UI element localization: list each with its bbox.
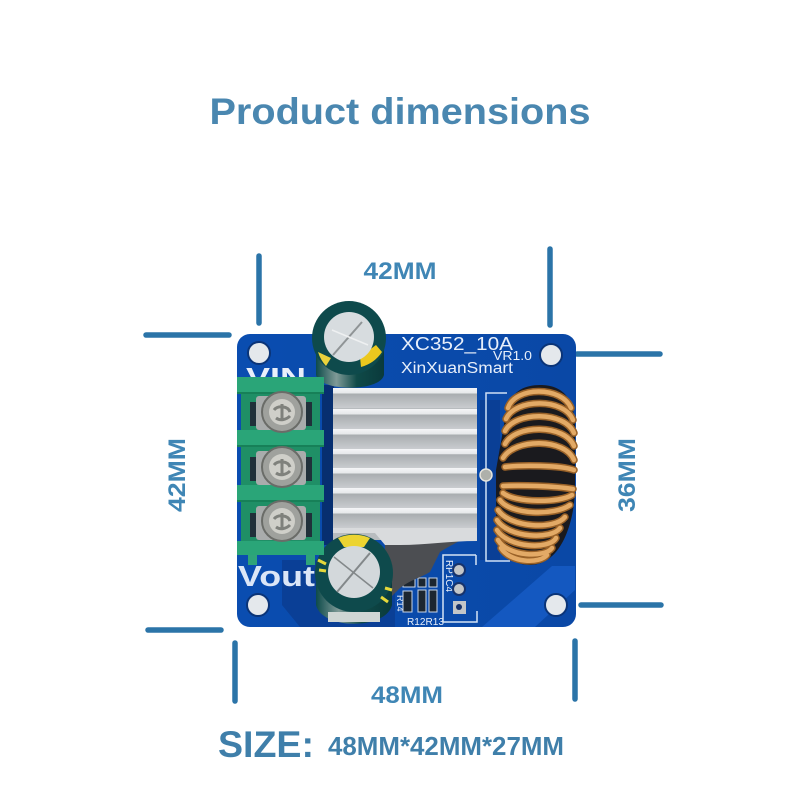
dimension lines xyxy=(146,249,661,701)
heat sink xyxy=(333,388,477,545)
connector outline and pads xyxy=(443,555,477,622)
board text: R12R13 xyxy=(407,616,444,628)
terminal screw 1 xyxy=(250,392,312,432)
green screw terminal xyxy=(237,377,324,565)
label: right height 36MM: 36MM xyxy=(614,438,641,512)
label: top width 42MM: 42MM xyxy=(364,258,436,285)
board text: XinXuanSmart xyxy=(401,360,514,377)
label: bottom width 48MM: 48MM xyxy=(371,682,443,709)
label: left height 42MM: 42MM xyxy=(164,438,191,512)
size summary: 48MM*42MM*27MM xyxy=(328,731,564,761)
top capacitor xyxy=(312,301,386,388)
pcb copper pours xyxy=(282,385,575,627)
board text: RP1C4 xyxy=(443,560,455,592)
circuit board xyxy=(237,301,576,628)
board text: R14 xyxy=(395,595,405,612)
inductor silkscreen outline xyxy=(486,393,510,561)
toroid inductor xyxy=(496,385,575,565)
bottom capacitor xyxy=(315,534,393,624)
solder point xyxy=(480,469,492,481)
board text: VIN xyxy=(246,362,306,392)
board text xyxy=(238,334,532,628)
size summary: SIZE: xyxy=(218,724,314,765)
pcb base xyxy=(237,334,576,627)
size summary xyxy=(218,724,564,765)
title: Product dimensions xyxy=(210,91,590,132)
terminal screw 3 xyxy=(250,501,312,541)
board text: XC352_10A xyxy=(401,334,513,355)
regulator chip xyxy=(385,530,470,598)
board text: Vout xyxy=(238,561,315,593)
terminal screw 2 xyxy=(250,447,312,487)
small smd parts xyxy=(403,578,437,612)
board text: VR1.0 xyxy=(493,348,532,363)
mounting holes xyxy=(247,342,567,616)
